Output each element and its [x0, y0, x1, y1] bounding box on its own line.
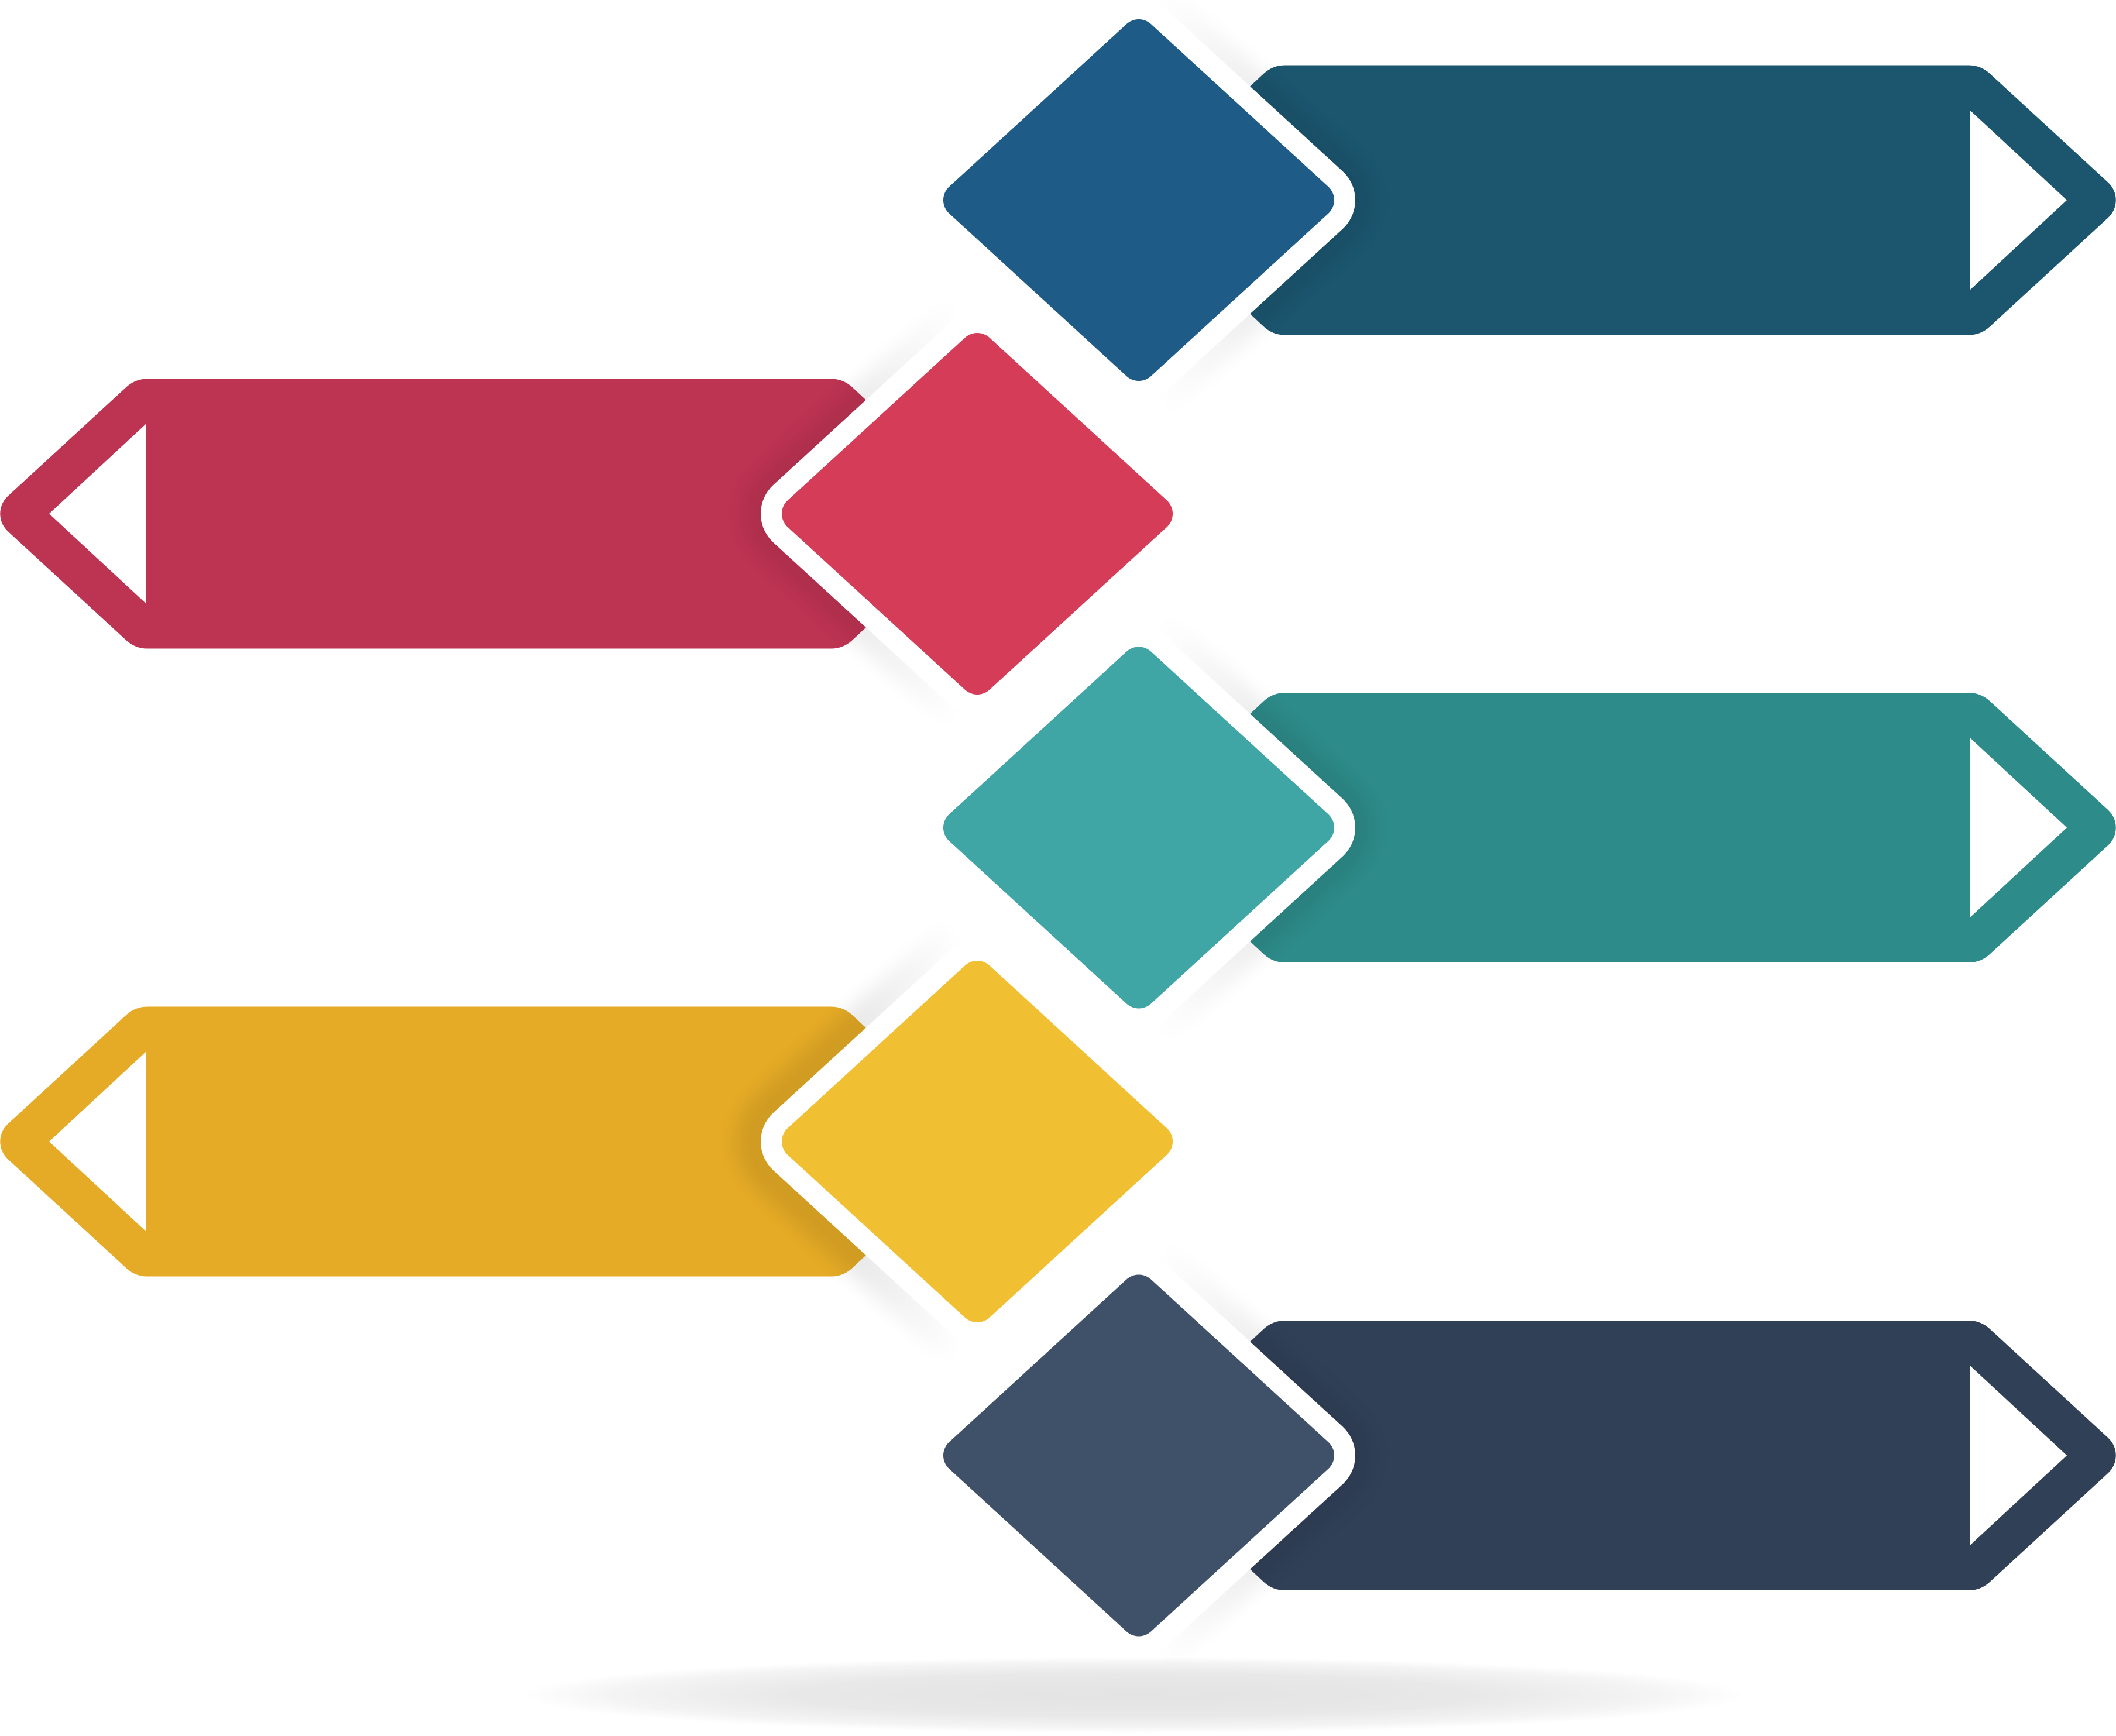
- arrowhead cutout: [1970, 1366, 2067, 1546]
- diamond shadow: [800, 979, 1155, 1304]
- arrow bar: [1147, 1321, 2116, 1590]
- diamond shadow: [961, 665, 1316, 990]
- row 4: amber arrow, pointing left: [0, 979, 1155, 1304]
- arrowhead cutout: [1970, 110, 2067, 290]
- diamond: [800, 351, 1155, 676]
- white diamond outline: [961, 37, 1316, 363]
- white diamond outline: [800, 979, 1155, 1304]
- diamond shadow: [961, 37, 1316, 363]
- arrow bar: [1147, 66, 2116, 335]
- arrowhead cutout: [49, 1051, 146, 1232]
- white diamond outline: [961, 1293, 1316, 1618]
- row 3: teal arrow, pointing right: [961, 665, 2116, 990]
- arrow bar: [0, 1006, 969, 1277]
- white diamond outline: [800, 351, 1155, 676]
- row 1: dark blue arrow, pointing right: [961, 37, 2116, 363]
- diamond: [961, 1293, 1316, 1618]
- diamond shadow: [800, 351, 1155, 676]
- diamond: [800, 979, 1155, 1304]
- arrowhead cutout: [1970, 737, 2067, 917]
- white diamond outline: [961, 665, 1316, 990]
- diamond: [961, 37, 1316, 363]
- ground shadow: [522, 1657, 1745, 1733]
- arrow bar: [1147, 693, 2116, 962]
- diamond: [961, 665, 1316, 990]
- diamond shadow: [961, 1293, 1316, 1618]
- arrowhead cutout: [49, 424, 146, 604]
- arrow bar: [0, 379, 969, 648]
- row 2: crimson arrow, pointing left: [0, 351, 1155, 676]
- row 5: navy arrow, pointing right: [961, 1293, 2116, 1618]
